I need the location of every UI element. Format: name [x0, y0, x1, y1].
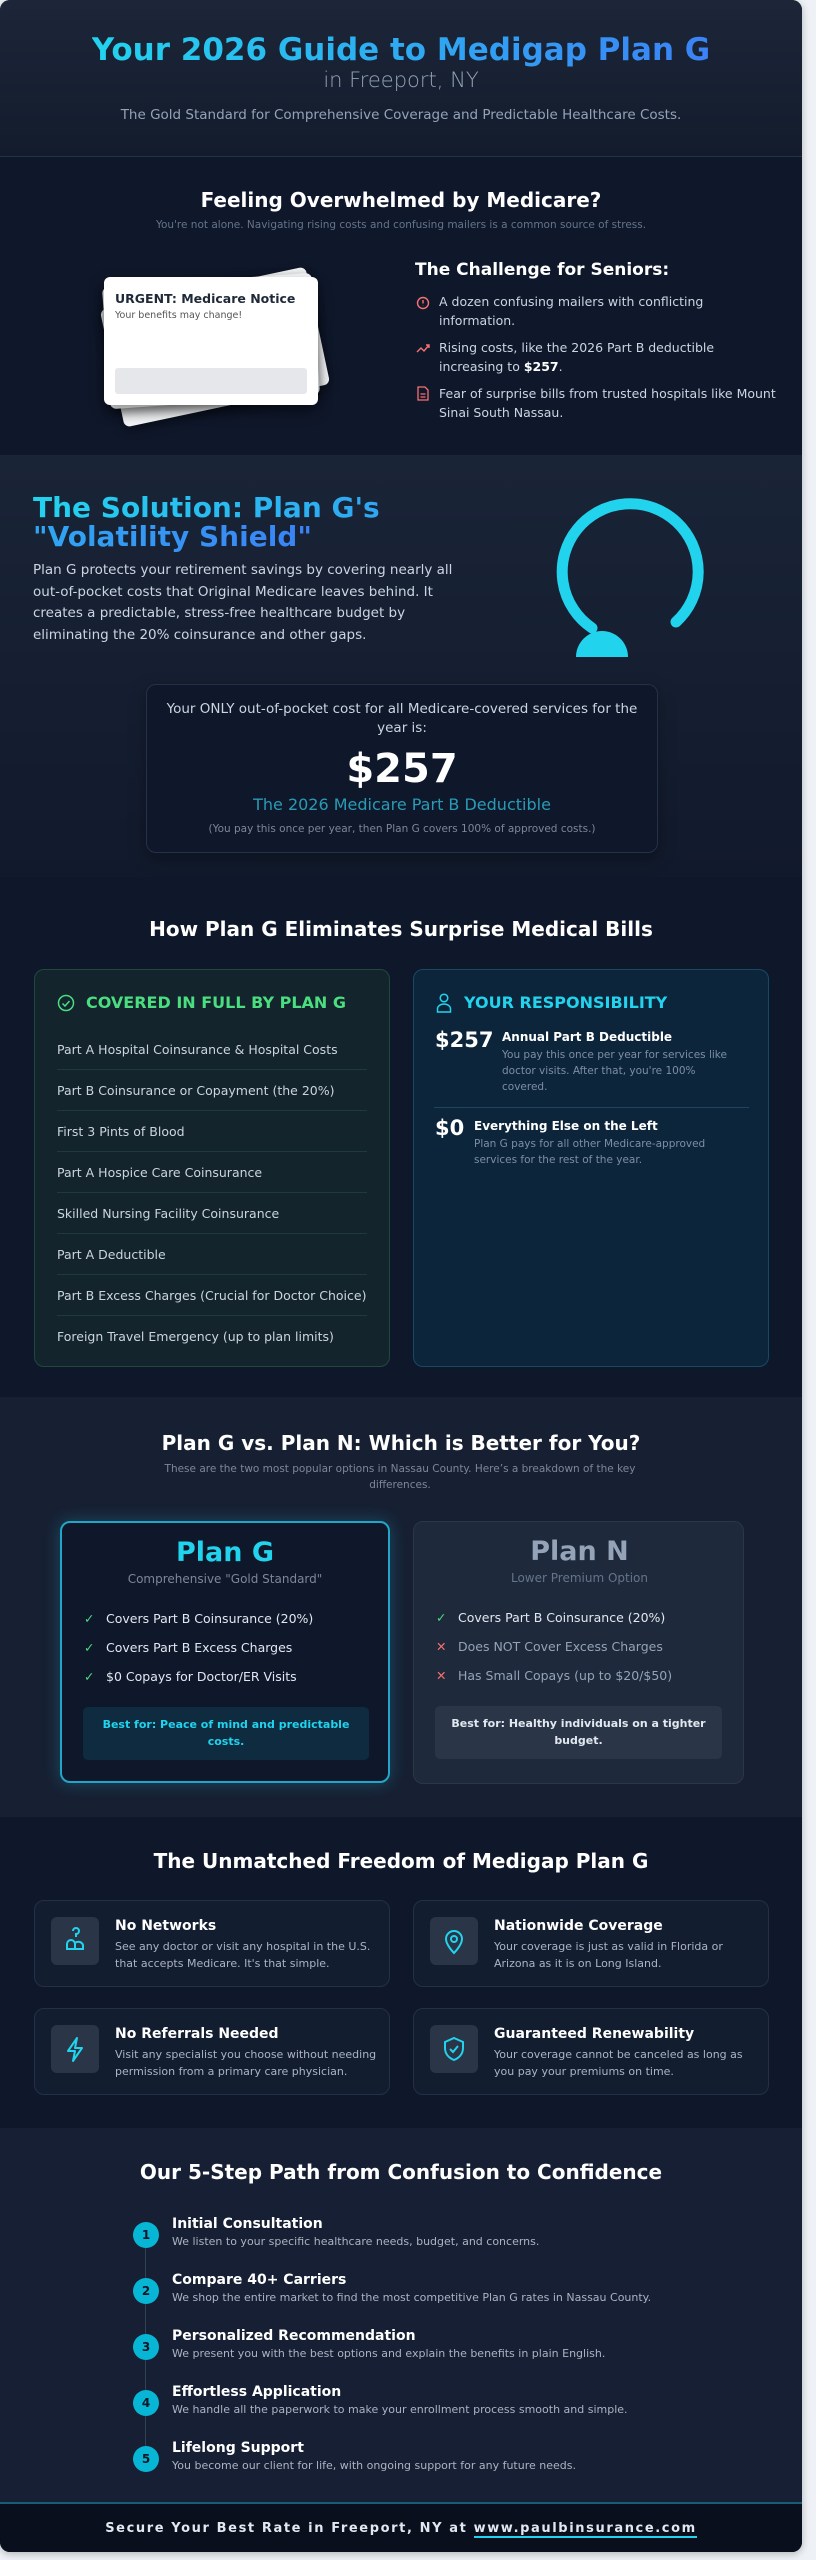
card: plan G: Comprehensive "Gold Standard" [128, 1572, 322, 1586]
challenge list: A dozen confusing mailers with conflicting information. [439, 294, 703, 328]
card: plan G: ✓ [84, 1669, 94, 1684]
title: Your 2026 Guide to Medigap Plan G [92, 32, 710, 68]
heading: Feeling Overwhelmed by Medicare? [201, 188, 601, 212]
panel: your responsibility: YOUR RESPONSIBILITY [464, 993, 667, 1012]
section: plan G vs N [0, 1397, 802, 1817]
card: plan N: Does NOT Cover Excess Charges [458, 1639, 663, 1654]
challenge list: Fear of surprise bills from trusted hospitals like Mount Sinai South Nassau. [439, 386, 776, 420]
cost callout: (You pay this once per year, then Plan G covers 100% of approved costs.) [208, 823, 596, 835]
footer [0, 2502, 802, 2552]
step 2 [133, 2272, 651, 2304]
step 4 [133, 2384, 628, 2416]
solution text: Plan G protects your retirement savings by covering nearly all out-of-pocket costs that Original Medicare leaves behind. It creates a predictable, stress-free healthcare budget by eliminating the 20% coinsurance and other gaps. [33, 562, 452, 643]
cost callout: $257 [346, 746, 458, 792]
step 1 [133, 2216, 539, 2248]
feature: renewability [413, 2008, 769, 2095]
solution heading: "Volatility Shield" [33, 520, 312, 553]
feature: no networks [34, 1900, 390, 1987]
cost callout [146, 684, 658, 853]
section: freedom [0, 1817, 802, 2128]
subtitle: in Freeport, NY [323, 68, 479, 92]
card: plan N: Plan N [530, 1536, 629, 1567]
best for: G: Best for: Peace of mind and predictable costs. [103, 1718, 349, 1748]
step 5 [133, 2440, 576, 2472]
cost callout: Your ONLY out-of-pocket cost for all Medicare-covered services for the year is: [167, 701, 637, 736]
step 1: We listen to your specific healthcare needs, budget, and concerns. [172, 2235, 539, 2248]
step 4: We handle all the paperwork to make your enrollment process smooth and simple. [172, 2403, 628, 2416]
card: plan G: Covers Part B Excess Charges [106, 1640, 292, 1655]
icon: stethoscope [556, 498, 704, 657]
step 2: 2 [142, 2284, 150, 2298]
feature: nationwide [413, 1900, 769, 1987]
tagline: The Gold Standard for Comprehensive Coverage and Predictable Healthcare Costs. [121, 107, 681, 123]
best for: G [83, 1707, 369, 1760]
panel: covered: Part A Hospital Coinsurance & Hospital Costs [57, 1042, 338, 1057]
feature: nationwide: Your coverage is just as valid in Florida or Arizona as it is on Long Island. [494, 1940, 723, 1970]
heading: How Plan G Eliminates Surprise Medical Bills [149, 917, 653, 941]
icon: alert [416, 296, 430, 310]
card: plan N: ✓ [436, 1610, 446, 1625]
card: plan G: $0 Copays for Doctor/ER Visits [106, 1669, 297, 1684]
icon: trend up [416, 344, 430, 352]
panel: your responsibility: Plan G pays for all other Medicare-approved services for the rest of the year. [474, 1138, 705, 1166]
subheading: These are the two most popular options in Nassau County. Here’s a breakdown of the key differences. [165, 1463, 635, 1491]
feature: no networks: No Networks [115, 1918, 216, 1934]
section: solution [0, 455, 802, 877]
card: plan G: ✓ [84, 1611, 94, 1626]
header [0, 0, 802, 157]
icon: document [417, 386, 429, 401]
subheading: You're not alone. Navigating rising costs and confusing mailers is a common source of stress. [156, 219, 646, 231]
front card: Your benefits may change! [115, 310, 242, 321]
section: steps [0, 2128, 802, 2502]
feature: no referrals [34, 2008, 390, 2095]
feature: no networks: See any doctor or visit any hospital in the U.S. that accepts Medicare. It's that simple. [115, 1940, 370, 1970]
step 2: Compare 40+ Carriers [172, 2272, 346, 2288]
panel: your responsibility: Everything Else on the Left [474, 1119, 658, 1133]
illustration: mail stack [98, 268, 330, 430]
heading: The Unmatched Freedom of Medigap Plan G [154, 1849, 648, 1873]
card: plan G: ✓ [84, 1640, 94, 1655]
card: plan G [60, 1521, 390, 1783]
card: plan N: Has Small Copays (up to $20/$50) [458, 1668, 672, 1683]
step 1: 1 [142, 2228, 150, 2242]
solution heading [33, 491, 380, 553]
panel: covered: Skilled Nursing Facility Coinsurance [57, 1206, 279, 1221]
feature: no referrals: Visit any specialist you choose without needing permission from a primary care physician. [115, 2048, 376, 2078]
card: plan N: Covers Part B Coinsurance (20%) [458, 1610, 665, 1625]
panel: your responsibility: Annual Part B Deductible [502, 1030, 672, 1044]
card: plan G: Plan G [176, 1537, 274, 1568]
feature: renewability: Guaranteed Renewability [494, 2026, 694, 2042]
panel: your responsibility: $0 [435, 1116, 464, 1140]
step 5: You become our client for life, with ongoing support for any future needs. [172, 2459, 576, 2472]
heading: Our 5-Step Path from Confusion to Confidence [140, 2160, 662, 2184]
panel: covered: First 3 Pints of Blood [57, 1124, 185, 1139]
feature: renewability: Your coverage cannot be canceled as long as you pay your premiums on time. [494, 2048, 743, 2078]
panel: covered: Part B Coinsurance or Copayment (the 20%) [57, 1083, 334, 1098]
step 3: 3 [142, 2340, 150, 2354]
section: how plan G eliminates [0, 877, 802, 1397]
card: plan N [413, 1521, 744, 1784]
step 1: Initial Consultation [172, 2216, 323, 2232]
panel: covered: Part A Hospice Care Coinsurance [57, 1165, 262, 1180]
front card: URGENT: Medicare Notice [115, 291, 295, 306]
step 5: 5 [142, 2452, 150, 2466]
challenge list: Rising costs, like the 2026 Part B deductible increasing to $257. [439, 340, 714, 374]
panel: your responsibility [413, 969, 769, 1367]
footer: Secure Your Best Rate in Freeport, NY at www.paulbinsurance.com [105, 2521, 697, 2536]
card: plan N: Lower Premium Option [511, 1571, 648, 1585]
step 3: We present you with the best options and explain the benefits in plain English. [172, 2347, 605, 2360]
card: plan N: ✕ [436, 1639, 446, 1654]
panel: covered: Foreign Travel Emergency (up to plan limits) [57, 1329, 334, 1344]
panel: covered: Part B Excess Charges (Crucial for Doctor Choice) [57, 1288, 366, 1303]
feature: nationwide: Nationwide Coverage [494, 1918, 663, 1934]
feature: no referrals: No Referrals Needed [115, 2026, 279, 2042]
icon: check circle [58, 994, 74, 1012]
heading: Plan G vs. Plan N: Which is Better for You? [162, 1431, 640, 1455]
panel: covered: COVERED IN FULL BY PLAN G [86, 993, 346, 1012]
challenge list: The Challenge for Seniors: [415, 260, 669, 280]
section: overwhelmed [0, 157, 802, 455]
cost callout: The 2026 Medicare Part B Deductible [253, 795, 551, 814]
panel: your responsibility: You pay this once per year for services like doctor visits. After that, you're 100% covered. [502, 1049, 727, 1093]
panel: covered: Part A Deductible [57, 1247, 166, 1262]
step 4: Effortless Application [172, 2384, 341, 2400]
challenge list [415, 260, 776, 420]
panel: your responsibility: $257 [435, 1028, 493, 1052]
step 4: 4 [142, 2396, 150, 2410]
panel: covered [34, 969, 390, 1367]
best for: N: Best for: Healthy individuals on a tighter budget. [451, 1717, 706, 1747]
step 2: We shop the entire market to find the most competitive Plan G rates in Nassau County. [172, 2291, 651, 2304]
step 3: Personalized Recommendation [172, 2328, 416, 2344]
best for: N [435, 1706, 722, 1759]
solution heading: The Solution: Plan G's [33, 491, 380, 524]
step 5: Lifelong Support [172, 2440, 304, 2456]
icon: user [436, 994, 452, 1013]
card: plan G: Covers Part B Coinsurance (20%) [106, 1611, 313, 1626]
card: plan N: ✕ [436, 1668, 446, 1683]
step 3 [133, 2328, 605, 2360]
front card [104, 277, 318, 405]
